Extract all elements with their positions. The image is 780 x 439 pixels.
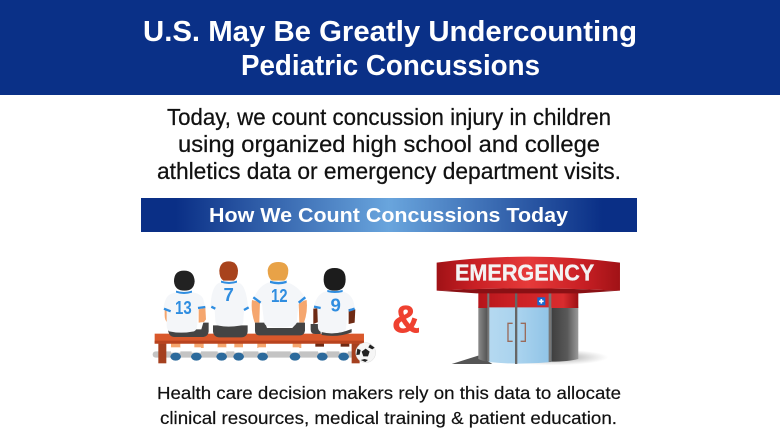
closing text: clinical resources, medical training & patient education. bbox=[160, 408, 617, 428]
shoes bbox=[170, 353, 349, 361]
intro text bbox=[157, 104, 621, 184]
medical cross sign bbox=[537, 297, 545, 305]
closing text bbox=[157, 383, 621, 428]
side walls bbox=[478, 307, 489, 362]
player 7: 7 bbox=[223, 284, 234, 305]
player 9: 9 bbox=[330, 294, 341, 315]
ampersand: & bbox=[392, 299, 420, 341]
soccer ball bbox=[356, 343, 376, 363]
illustration: players on bench bbox=[153, 261, 376, 363]
canopy bbox=[437, 257, 620, 291]
socks bbox=[171, 347, 348, 353]
illustration: emergency building bbox=[437, 257, 620, 365]
title banner bbox=[0, 0, 780, 95]
player 12 bbox=[252, 262, 307, 335]
intro text: using organized high school and college bbox=[178, 131, 600, 157]
player 7 bbox=[211, 261, 249, 337]
bench shadow bbox=[153, 351, 359, 358]
player 13: 13 bbox=[175, 297, 192, 318]
illustration: emergency building: EMERGENCY bbox=[455, 260, 594, 286]
intro text: athletics data or emergency department visits. bbox=[157, 158, 621, 184]
section heading bar bbox=[141, 198, 637, 232]
section heading bar: How We Count Concussions Today bbox=[209, 204, 569, 227]
intro text: Today, we count concussion injury in children bbox=[167, 104, 611, 130]
door handles bbox=[508, 323, 525, 341]
ground shadow bbox=[498, 349, 608, 365]
title banner: U.S. May Be Greatly Undercounting bbox=[143, 16, 637, 48]
player legs bbox=[171, 343, 301, 348]
player 9 bbox=[311, 268, 355, 336]
closing text: Health care decision makers rely on this data to allocate bbox=[157, 383, 621, 403]
red upper wall bbox=[478, 290, 578, 308]
title banner: Pediatric Concussions bbox=[241, 50, 540, 82]
player 13 bbox=[163, 271, 209, 337]
player 12: 12 bbox=[271, 285, 288, 306]
bench bbox=[158, 343, 166, 363]
glass doors bbox=[489, 307, 551, 364]
